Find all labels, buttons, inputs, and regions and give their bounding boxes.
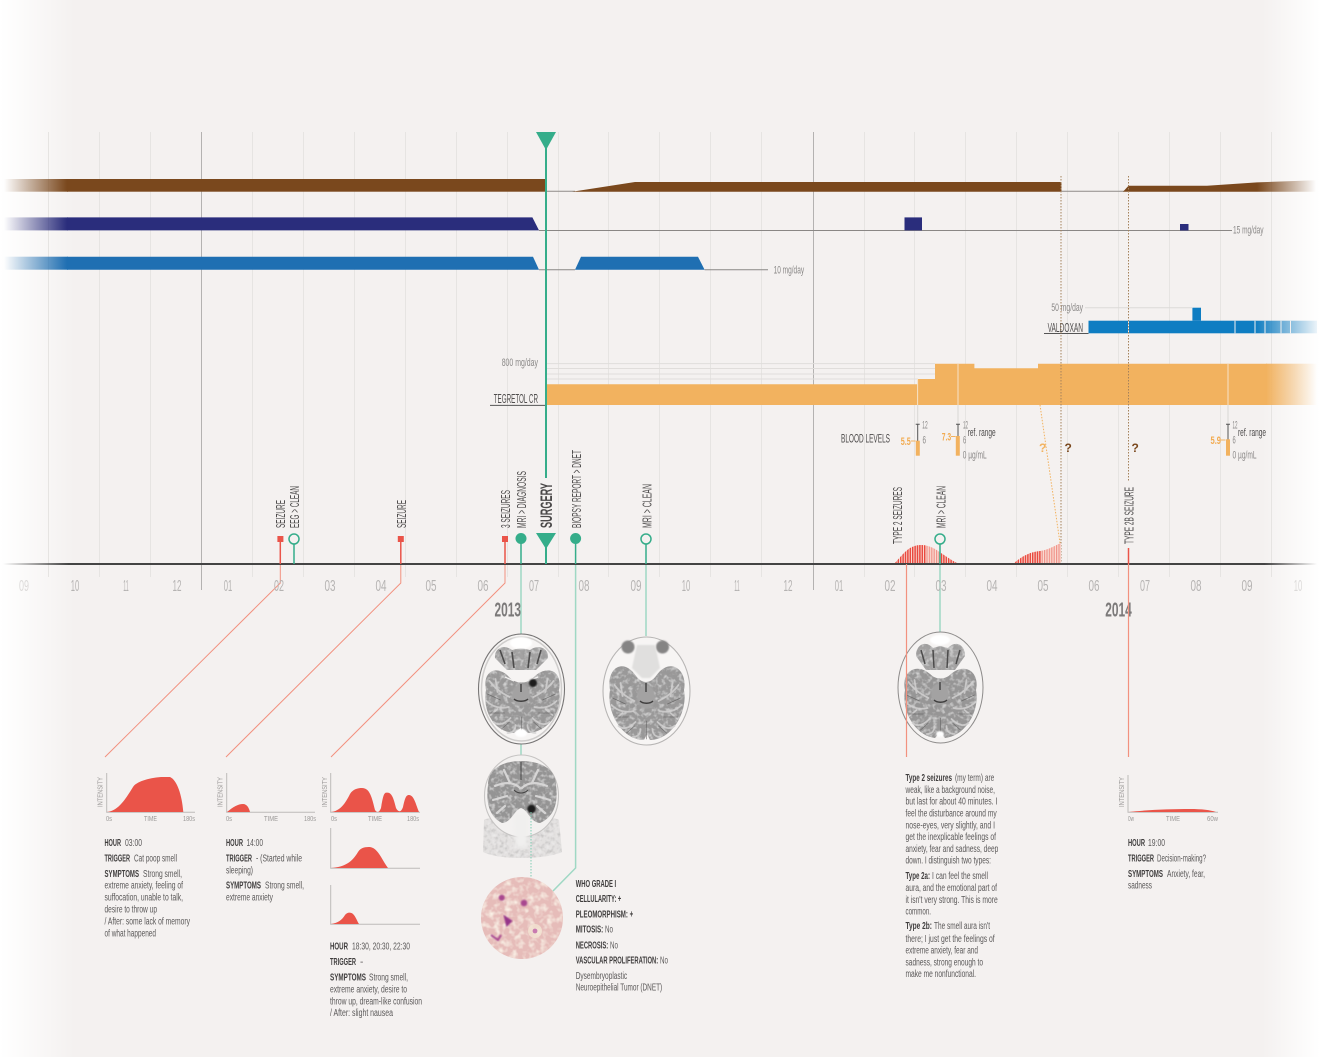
blood level marker 5.9 <box>1210 419 1266 461</box>
medication bar: brown <box>4 179 1316 192</box>
text: seizure 4 description: HOUR <box>1128 838 1145 849</box>
event: 3 seizures <box>498 490 513 564</box>
blood level marker 5.9: 12 <box>1232 419 1238 431</box>
blood level marker 7.3: 7.3 <box>942 432 951 444</box>
label: 800 mg/day: 800 mg/day <box>502 357 538 369</box>
seizure detail 3 <box>322 773 422 1019</box>
text: biopsy findings <box>576 879 668 994</box>
blood level marker 5.5: 5.5 <box>901 436 911 448</box>
text: type 2 seizures description: (my term) are <box>955 773 995 784</box>
blood level marker 7.3: 12 <box>963 419 968 431</box>
text: seizure 1 description: Cat poop smell <box>134 854 177 864</box>
intensity chart 3 <box>322 773 420 823</box>
month labels: 07 <box>529 578 539 595</box>
month labels: 05 <box>1038 578 1049 595</box>
blood level marker 7.3 <box>942 419 996 461</box>
text: SEIZURE <box>273 500 288 528</box>
dose label: 15 mg/day: 15 mg/day <box>1233 224 1264 236</box>
intensity chart 4 <box>1119 775 1219 823</box>
text: seizure 2 description: 14:00 <box>246 838 263 849</box>
dotted link to histology <box>530 812 532 877</box>
event: 3 seizures: 3 SEIZURES <box>498 490 513 528</box>
text: type 2 seizures description: extreme anxiety, fear and <box>906 946 978 956</box>
event: surgery: SURGERY <box>537 483 556 528</box>
text: seizure 3 description <box>330 942 422 1019</box>
blood level marker 5.9: ref. range <box>1238 427 1266 439</box>
event: surgery <box>536 483 556 564</box>
text: seizure 3 description: throw up, dream-like confusion <box>330 996 422 1008</box>
month labels: 08 <box>1190 578 1202 595</box>
blood level marker 7.3: ref. range <box>968 427 996 439</box>
text: type 2 seizures description: get the inexplicable feelings of <box>906 832 996 843</box>
text: seizure 4 description: Decision-making? <box>1157 854 1206 864</box>
month labels: 11 <box>123 578 129 595</box>
intensity chart 4: 60w <box>1207 816 1219 823</box>
event: seizure <box>394 500 409 564</box>
month labels: 04 <box>986 578 998 595</box>
text: seizure 1 description: TRIGGER <box>104 854 130 864</box>
text: biopsy findings: PLEOMORPHISM: + <box>576 910 633 920</box>
month labels: 09 <box>19 578 29 595</box>
seizure detail 2 <box>218 773 316 904</box>
text: seizure 1 description: Strong smell, <box>143 869 182 880</box>
month labels: 01 <box>224 578 232 595</box>
blood level marker 5.5 <box>901 419 928 456</box>
month labels: 06 <box>478 578 489 595</box>
intensity chart 2: INTENSITY <box>218 777 224 807</box>
intensity chart 4: TIME <box>1166 816 1180 823</box>
intensity chart 3: INTENSITY <box>322 777 329 807</box>
month labels: 03 <box>324 578 336 595</box>
text: biopsy findings: MITOSIS: <box>576 924 603 936</box>
intensity chart 3b <box>331 828 420 868</box>
text: seizure 2 description: extreme anxiety <box>226 892 273 904</box>
label: Valdoxan: VALDOXAN <box>1048 320 1083 335</box>
month labels: 06 <box>1088 578 1100 595</box>
text: seizure 2 description <box>226 838 304 904</box>
text: type 2 seizures description: anxiety, fear and sadness, deep <box>906 844 999 855</box>
text: seizure 1 description <box>104 838 190 940</box>
connector lines to details <box>105 564 940 891</box>
intensity chart 1: 0s <box>106 816 112 823</box>
blood level marker 7.3: 6 <box>963 434 966 446</box>
month labels: 12 <box>784 578 793 595</box>
text: type 2 seizures description: down. I distinguish two types: <box>906 856 991 866</box>
timeline axis <box>3 563 1317 622</box>
month labels <box>19 578 1302 595</box>
text: type 2 seizures description: but last for about 40 minutes. I <box>906 796 997 808</box>
text: seizure 3 description: - <box>360 957 363 968</box>
event: seizure <box>273 500 288 564</box>
text: seizure 4 description <box>1128 838 1206 892</box>
event: MRI clean: MRI > CLEAN <box>640 484 654 528</box>
month labels: 10 <box>71 578 79 595</box>
text: type 2 seizures description: I can feel the smell <box>932 871 988 882</box>
image: histology micrograph <box>481 877 563 959</box>
intensity chart 3c <box>331 885 420 924</box>
text: seizure 1 description: desire to throw up <box>104 904 157 916</box>
text: seizure 1 description: suffocation, unable to talk, <box>104 892 183 904</box>
image: axial brain MRI clean <box>603 637 690 745</box>
text: seizure 3 description: extreme anxiety, desire to <box>330 984 407 996</box>
blood level marker 5.9: 5.9 <box>1210 435 1221 447</box>
event: MRI clean <box>640 484 654 564</box>
month labels: 09 <box>1242 578 1253 595</box>
month labels: 05 <box>426 578 437 595</box>
text: type 2 seizures description: Type 2 seizures <box>906 773 952 784</box>
text: seizure 1 description: of what happened <box>104 928 156 940</box>
text: seizure 4 description: 19:00 <box>1148 838 1165 849</box>
text: biopsy findings: No <box>610 940 618 952</box>
text: seizure 1 description: extreme anxiety, feeling of <box>104 880 183 892</box>
text: seizure 2 description: HOUR <box>226 838 243 849</box>
text: seizure 3 description: / After: slight nausea <box>330 1008 393 1019</box>
year 2013: 2013 <box>494 600 521 622</box>
text: seizure 2 description: SYMPTOMS <box>226 880 261 892</box>
text: type 2 seizures description: Type 2b: <box>906 921 932 932</box>
image: axial brain MRI with lesion <box>478 634 564 744</box>
intensity chart 1 <box>98 773 195 823</box>
medication gap dotted lines and unknown marks <box>1039 176 1139 564</box>
text: biopsy findings: CELLULARITY: + <box>576 894 621 905</box>
seizure detail 1 <box>98 773 195 940</box>
event: MRI diagnosis: MRI > DIAGNOSIS <box>514 471 529 528</box>
text: type 2 seizures description: The smell aura isn't <box>934 921 990 932</box>
medication gap dotted lines and unknown marks: ? <box>1132 441 1139 455</box>
seizure detail 4 <box>1119 775 1219 892</box>
blood level marker 5.5: 6 <box>922 434 926 446</box>
text: seizure 2 description: - (Started while <box>256 854 302 864</box>
medication bar: blue <box>4 257 804 276</box>
text: seizure 3 description: SYMPTOMS <box>330 972 366 984</box>
timeline axis: 10 <box>1294 578 1302 595</box>
intensity chart 3: 180s <box>407 816 419 823</box>
medication gap dotted lines and unknown marks: ? <box>1064 441 1072 455</box>
medication bar: navy <box>4 217 1264 236</box>
text: type 2 seizures description <box>905 773 999 980</box>
text: seizure 1 description: 03:00 <box>125 838 142 849</box>
event: MRI clean 2014 <box>934 486 948 564</box>
event: type 2 seizures: TYPE 2 SEIZURES <box>890 487 905 544</box>
medication gap dotted lines and unknown marks: ? <box>1039 441 1046 455</box>
month labels: 08 <box>578 578 590 595</box>
intensity chart 2: TIME <box>264 816 278 823</box>
text: type 2 seizures description: there; I just get the feelings of <box>906 934 995 945</box>
text: type 2 seizures description: sadness, strong enough to <box>906 958 983 968</box>
month labels: 04 <box>376 578 387 595</box>
month labels: 03 <box>936 578 947 595</box>
surgery line and top marker <box>536 132 556 478</box>
text: type 2 seizures description: nose-eyes, very slightly, and I <box>906 820 995 832</box>
text: seizure 1 description: HOUR <box>104 838 121 849</box>
text: SEIZURE <box>394 500 409 528</box>
intensity chart 2: 0s <box>226 816 232 823</box>
event: MRI diagnosis <box>514 471 529 564</box>
event: biopsy report: BIOPSY REPORT > DNET <box>569 450 584 528</box>
intensity chart 4: 0w <box>1128 816 1135 823</box>
text: seizure 3 description: TRIGGER <box>330 957 356 968</box>
text: seizure 2 description: sleeping) <box>226 866 253 876</box>
medication bar: Tegretol CR: TEGRETOL CR <box>494 391 538 406</box>
event: biopsy report <box>569 450 584 564</box>
dose label: 10 mg/day: 10 mg/day <box>774 264 804 276</box>
month labels: 12 <box>172 578 182 595</box>
event: MRI clean 2014: MRI > CLEAN <box>934 486 948 528</box>
text: type 2 seizures description: common. <box>906 906 931 918</box>
text: EEG > CLEAN <box>287 486 302 528</box>
text: biopsy findings: Dysembryoplastic <box>576 971 627 982</box>
event: type 2B seizure <box>1122 487 1136 564</box>
text: biopsy findings: No <box>605 924 613 936</box>
text: seizure 2 description: TRIGGER <box>226 854 252 864</box>
intensity chart 1: TIME <box>144 816 157 823</box>
blood level marker 5.9: 0 µg/mL <box>1232 449 1256 461</box>
text: biopsy findings: Neuroepithelial Tumor (DNET) <box>576 982 662 994</box>
medication bar: Valdoxan <box>1044 302 1317 335</box>
text: seizure 4 description: SYMPTOMS <box>1128 869 1163 880</box>
text: type 2 seizures description: it isn't very strong. This is more <box>906 895 998 906</box>
text: type 2 seizures description: weak, like a background noise, <box>905 785 995 796</box>
month labels: 07 <box>1140 578 1150 595</box>
text: type 2 seizures description: feel the disturbance around my <box>906 808 997 820</box>
intensity chart 3: TIME <box>368 816 382 823</box>
text: biopsy findings: NECROSIS: <box>576 940 608 952</box>
text: biopsy findings: No <box>660 956 668 966</box>
month labels: 11 <box>734 578 740 595</box>
connector lines over follow-up scan <box>906 564 1128 757</box>
text: type 2 seizures description: Type 2a: <box>906 871 930 882</box>
intensity chart 3: 0s <box>331 816 337 823</box>
event: EEG clean <box>287 486 302 564</box>
month labels: 02 <box>274 578 284 595</box>
text: type 2 seizures description: aura, and the emotional part of <box>906 883 997 894</box>
text: seizure 3 description: Strong smell, <box>369 972 408 984</box>
seizure intensity areas <box>894 543 1061 564</box>
event: type 2B seizure: TYPE 2B SEIZURE <box>1122 487 1136 544</box>
text: seizure 4 description: Anxiety, fear, <box>1167 869 1205 880</box>
year 2014: 2014 <box>1105 600 1132 622</box>
text: seizure 4 description: TRIGGER <box>1128 854 1154 864</box>
blood levels <box>841 405 1266 461</box>
intensity chart 2 <box>218 773 316 823</box>
intensity chart 1: 180s <box>183 816 195 823</box>
text: seizure 1 description: SYMPTOMS <box>104 869 139 880</box>
month labels: 09 <box>630 578 642 595</box>
medication bar: Tegretol CR <box>490 357 1317 406</box>
text: seizure 3 description: 18:30, 20:30, 22:30 <box>352 942 410 952</box>
text: seizure 3 description: HOUR <box>330 942 348 952</box>
month labels: 01 <box>835 578 843 595</box>
intensity chart 4: INTENSITY <box>1119 777 1126 807</box>
text: seizure 4 description: sadness <box>1128 880 1152 892</box>
blood level marker 5.9: 6 <box>1232 434 1236 446</box>
image: axial brain MRI follow-up <box>898 632 983 743</box>
month labels: 10 <box>682 578 690 595</box>
blood levels: 12 <box>922 419 928 431</box>
text: biopsy findings: WHO GRADE I <box>576 879 616 890</box>
blood level marker 7.3: 0 µg/mL <box>963 449 987 461</box>
heading: blood levels: BLOOD LEVELS <box>841 432 890 446</box>
image: coronal brain MRI <box>483 755 562 877</box>
text: type 2 seizures description: make me nonfunctional. <box>906 969 976 980</box>
text: seizure 1 description: / After: some lack of memory <box>104 916 190 928</box>
intensity chart 1: INTENSITY <box>98 777 104 807</box>
intensity chart 2: 180s <box>304 816 316 823</box>
text: biopsy findings: VASCULAR PROLIFERATION: <box>576 956 658 966</box>
month labels: 02 <box>884 578 896 595</box>
text: seizure 2 description: Strong smell, <box>265 880 304 892</box>
label: 50 mg/day: 50 mg/day <box>1051 302 1083 314</box>
